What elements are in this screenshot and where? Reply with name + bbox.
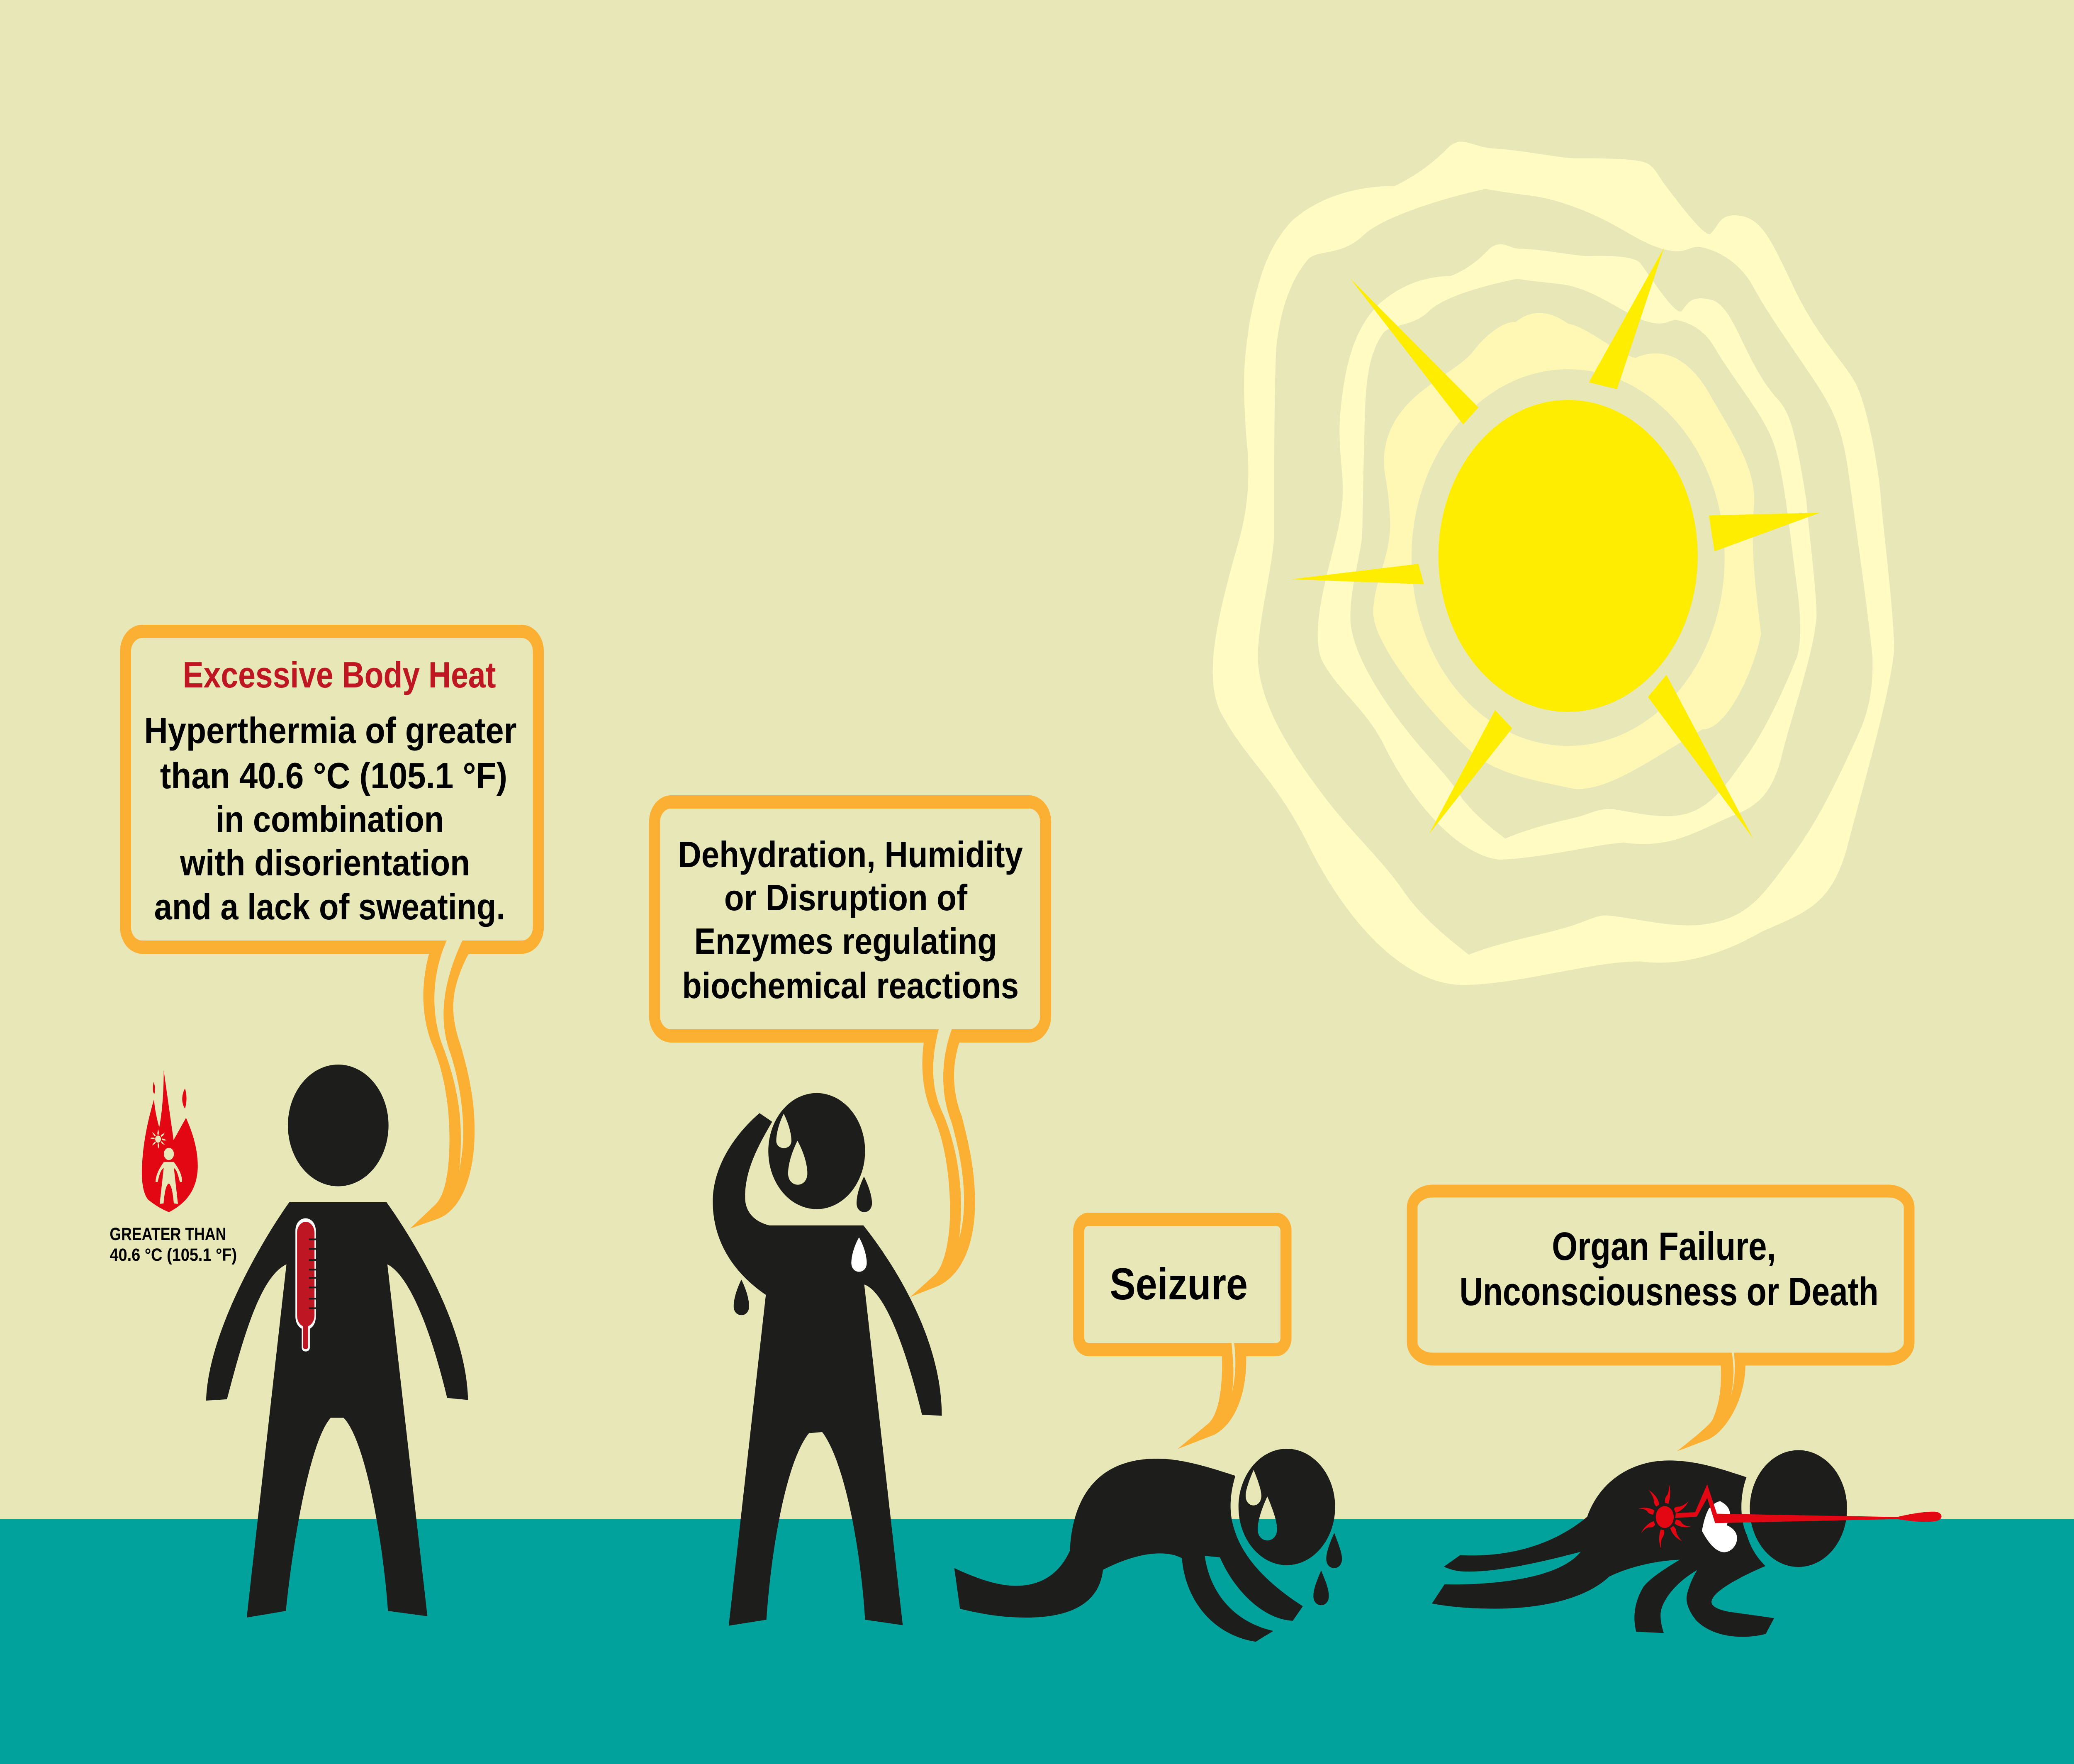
text block: hyperthermia description: than 40.6 °C (105.1 °F) bbox=[160, 756, 507, 797]
sun middle heat ring bbox=[1318, 244, 1816, 860]
text block: organ failure: Unconsciousness or Death bbox=[1459, 1269, 1879, 1314]
speech bubble frame bbox=[1079, 1219, 1286, 1350]
icon: flame with child bbox=[142, 1070, 198, 1212]
sun outer heat ring bbox=[1213, 141, 1894, 985]
text block: dehydration description bbox=[678, 835, 1023, 1006]
panel: stage 1 excessive body heat bbox=[110, 631, 538, 1618]
speech bubble frame bbox=[655, 802, 1046, 1036]
text block: dehydration description: or Disruption of bbox=[724, 878, 968, 919]
text block: dehydration description: Enzymes regulating bbox=[694, 921, 997, 962]
text block: hyperthermia description: and a lack of sweating. bbox=[154, 887, 505, 928]
sun disc bbox=[1439, 400, 1698, 712]
heading: excessive body heat: Excessive Body Heat bbox=[183, 655, 496, 696]
text block: hyperthermia description bbox=[144, 711, 516, 928]
caption: greater than temperature: GREATER THAN bbox=[110, 1224, 226, 1244]
speech bubble tail bbox=[910, 1028, 975, 1297]
red pulse line bbox=[1675, 1484, 1942, 1523]
speech bubble tail bbox=[1677, 1351, 1745, 1451]
icon: organ, burst and pulse line bbox=[1638, 1484, 1942, 1552]
speech bubble tail bbox=[410, 939, 475, 1228]
figure: standing person bbox=[206, 1065, 468, 1618]
panel: stage 4 organ failure bbox=[1412, 1191, 1942, 1637]
speech bubble frame bbox=[126, 631, 538, 947]
speech bubble frame bbox=[1412, 1191, 1909, 1359]
white organ bbox=[1702, 1501, 1737, 1552]
figure: sweating person holding head bbox=[713, 1093, 942, 1626]
caption: greater than temperature bbox=[110, 1224, 237, 1265]
sun rays bbox=[1291, 248, 1820, 838]
panel: stage 3 seizure bbox=[954, 1219, 1342, 1642]
icon: thermometer bbox=[295, 1218, 316, 1352]
figure: collapsing person bbox=[954, 1449, 1342, 1642]
text block: hyperthermia description: in combination bbox=[216, 799, 444, 840]
label: seizure: Seizure bbox=[1110, 1259, 1248, 1309]
text block: organ failure: Organ Failure, bbox=[1552, 1224, 1776, 1269]
sun illustration bbox=[1213, 141, 1894, 985]
text block: dehydration description: biochemical reactions bbox=[682, 966, 1019, 1006]
gap around sun disc bbox=[1412, 369, 1725, 746]
falling sweat drops bbox=[1313, 1533, 1342, 1605]
text block: dehydration description: Dehydration, Humidity bbox=[678, 835, 1023, 875]
text block: hyperthermia description: Hyperthermia of greater bbox=[144, 711, 516, 751]
caption: greater than temperature: 40.6 °C (105.1 °F) bbox=[110, 1245, 237, 1265]
text block: organ failure bbox=[1459, 1224, 1879, 1314]
text block: hyperthermia description: with disorientation bbox=[180, 843, 470, 884]
sweat drops bbox=[734, 1113, 872, 1315]
background: teal ground bbox=[0, 1519, 2074, 1764]
sun inner heat ring bbox=[1373, 313, 1761, 789]
red burst bbox=[1638, 1484, 1691, 1549]
panel: stage 2 dehydration bbox=[655, 802, 1046, 1626]
figure: person lying down bbox=[1432, 1450, 1847, 1637]
speech bubble tail bbox=[1178, 1342, 1246, 1449]
